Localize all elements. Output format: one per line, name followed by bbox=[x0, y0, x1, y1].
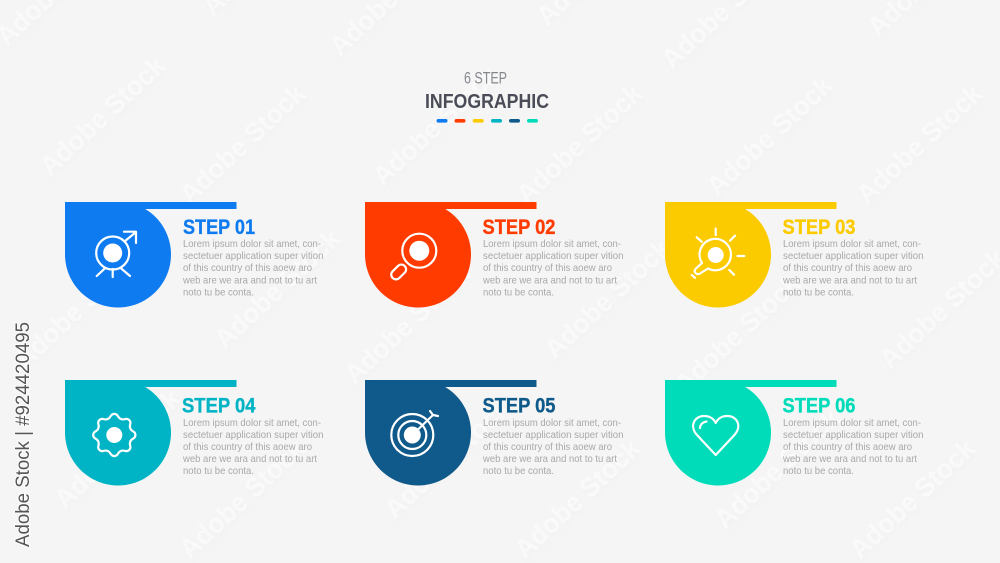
description: noto tu be conta. bbox=[783, 286, 854, 298]
description bbox=[182, 417, 324, 477]
watermark pattern: Adobe Stock bbox=[209, 223, 347, 354]
heading: STEP 05 bbox=[482, 394, 556, 418]
description: web are we ara and not to tu art bbox=[182, 453, 317, 465]
badge shape bbox=[665, 380, 836, 485]
watermark pattern: Adobe Stock bbox=[851, 78, 989, 209]
description: Lorem ipsum dolor sit amet, con- bbox=[783, 238, 921, 250]
description: web are we ara and not to tu art bbox=[482, 453, 617, 465]
heading: STEP 04 bbox=[182, 394, 256, 418]
description bbox=[782, 417, 924, 477]
description: Lorem ipsum dolor sit amet, con- bbox=[483, 238, 621, 250]
watermark pattern: Adobe Stock bbox=[539, 233, 677, 364]
description: noto tu be conta. bbox=[183, 465, 254, 477]
watermark pattern: Adobe Stock bbox=[174, 78, 312, 209]
description: of this country of this aoew aro bbox=[183, 262, 312, 274]
description: web are we ara and not to tu art bbox=[782, 274, 917, 286]
watermark pattern: Adobe Stock bbox=[49, 383, 187, 514]
heading: STEP 01 bbox=[183, 215, 255, 239]
description: of this country of this aoew aro bbox=[483, 262, 612, 274]
panel: step 04 bbox=[65, 380, 324, 485]
title: 6 step: 6 STEP bbox=[464, 68, 507, 88]
icon: male symbol target bbox=[96, 232, 136, 277]
watermark pattern: Adobe Stock bbox=[339, 258, 477, 389]
description: sectetuer application super vition bbox=[183, 429, 324, 441]
description: of this country of this aoew aro bbox=[783, 441, 912, 453]
panel: step 01 bbox=[65, 202, 324, 307]
icon: heart bbox=[693, 416, 738, 455]
description: web are we ara and not to tu art bbox=[182, 274, 317, 286]
icon: gear badge bbox=[93, 414, 135, 456]
description: web are we ara and not to tu art bbox=[482, 274, 617, 286]
watermark pattern: Adobe Stock bbox=[379, 393, 517, 524]
description: noto tu be conta. bbox=[483, 286, 554, 298]
description bbox=[482, 417, 624, 477]
description: web are we ara and not to tu art bbox=[782, 453, 917, 465]
heading: STEP 06 bbox=[782, 394, 856, 418]
badge shape bbox=[365, 202, 536, 307]
colour dash legend bbox=[436, 119, 538, 123]
panel: step 03 bbox=[665, 202, 924, 307]
side credit: Adobe Stock id: Adobe Stock | #924420495 bbox=[13, 322, 34, 547]
watermark pattern: Adobe Stock bbox=[367, 60, 505, 191]
description: noto tu be conta. bbox=[183, 286, 254, 298]
watermark pattern: Adobe Stock bbox=[9, 243, 147, 374]
description: sectetuer application super vition bbox=[783, 250, 924, 262]
watermark pattern: Adobe Stock bbox=[174, 433, 312, 563]
badge shape bbox=[665, 202, 836, 307]
panel: step 05 bbox=[365, 380, 624, 485]
watermark pattern: Adobe Stock bbox=[34, 50, 172, 181]
description: of this country of this aoew aro bbox=[783, 262, 912, 274]
watermark pattern: Adobe Stock bbox=[709, 403, 847, 534]
description: noto tu be conta. bbox=[483, 465, 554, 477]
badge shape bbox=[365, 380, 536, 485]
heading: STEP 03 bbox=[782, 215, 856, 239]
description: Lorem ipsum dolor sit amet, con- bbox=[183, 417, 321, 429]
title: infographic: INFOGRAPHIC bbox=[425, 90, 549, 113]
panel: step 06 bbox=[665, 380, 924, 485]
description: of this country of this aoew aro bbox=[183, 441, 312, 453]
title block bbox=[425, 68, 549, 123]
watermark pattern: Adobe Stock bbox=[844, 433, 982, 563]
description bbox=[182, 238, 324, 298]
description bbox=[482, 238, 624, 298]
heading: STEP 02 bbox=[482, 215, 556, 239]
description: of this country of this aoew aro bbox=[483, 441, 612, 453]
description: sectetuer application super vition bbox=[483, 429, 624, 441]
description: sectetuer application super vition bbox=[483, 250, 624, 262]
description: Lorem ipsum dolor sit amet, con- bbox=[783, 417, 921, 429]
icon: magnifier bbox=[389, 234, 436, 281]
description: sectetuer application super vition bbox=[183, 250, 324, 262]
description bbox=[782, 238, 924, 298]
watermark pattern: Adobe Stock bbox=[511, 78, 649, 209]
watermark pattern: Adobe Stock bbox=[509, 433, 647, 563]
description: Lorem ipsum dolor sit amet, con- bbox=[483, 417, 621, 429]
description: noto tu be conta. bbox=[783, 465, 854, 477]
watermark pattern: Adobe Stock bbox=[701, 70, 839, 201]
icon: light bulb bbox=[692, 228, 744, 278]
panel: step 02 bbox=[365, 202, 624, 307]
watermark pattern: Adobe Stock bbox=[669, 268, 807, 399]
description: Lorem ipsum dolor sit amet, con- bbox=[183, 238, 321, 250]
badge shape bbox=[65, 202, 236, 307]
badge shape bbox=[65, 380, 236, 485]
icon: target with arrow bbox=[391, 411, 438, 456]
description: sectetuer application super vition bbox=[783, 429, 924, 441]
